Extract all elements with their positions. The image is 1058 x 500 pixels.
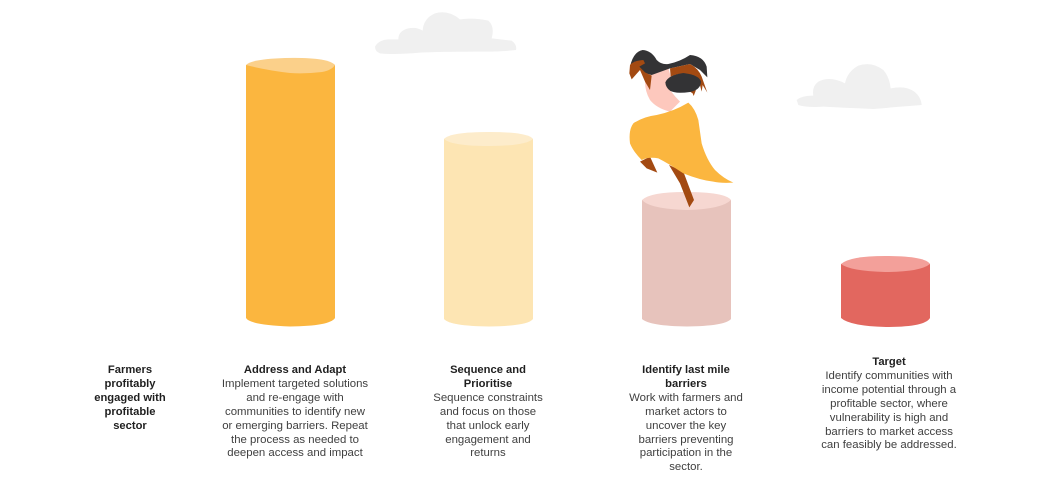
hair: right brown strands bbox=[670, 64, 707, 96]
text: Address and Adapt bbox=[222, 364, 368, 459]
text: Sequence and Prioritise: engagement and bbox=[445, 434, 531, 446]
text: Sequence and Prioritise bbox=[433, 364, 543, 459]
text: Address and Adapt: communities to identify new bbox=[225, 406, 365, 418]
hair: front lock bbox=[665, 73, 701, 93]
text: Target: can feasibly be addressed. bbox=[821, 439, 957, 451]
text: Farmers profitably engaged: profitably bbox=[105, 378, 155, 390]
bar: Identify last mile barriers bbox=[642, 192, 731, 326]
bar: Sequence and Prioritise bbox=[444, 132, 533, 326]
text: Sequence and Prioritise: and focus on those bbox=[440, 406, 536, 418]
text: Identify last mile barriers: market actors to bbox=[645, 406, 727, 418]
cloud: right bbox=[797, 64, 922, 109]
hair bbox=[630, 50, 707, 77]
text: Target: profitable sector, where bbox=[830, 398, 948, 410]
text: Address and Adapt: or emerging barriers. Repeat bbox=[222, 420, 368, 432]
back leg bbox=[640, 157, 657, 173]
text: Identify last mile barriers: Identify last mile bbox=[642, 364, 730, 376]
skin bbox=[645, 68, 680, 112]
figure: dancing woman bbox=[629, 50, 733, 207]
text: Identify last mile barriers: barriers preventing bbox=[639, 434, 733, 446]
text: Identify last mile barriers: sector. bbox=[669, 461, 703, 473]
text: Identify last mile barriers: barriers bbox=[665, 378, 707, 390]
text: Target: barriers to market access bbox=[825, 426, 953, 438]
text: Farmers profitably engaged: engaged with bbox=[94, 392, 166, 404]
bar: Address and Adapt bbox=[246, 58, 335, 327]
text: Farmers profitably engaged: profitable bbox=[105, 406, 155, 418]
text: Identify last mile barriers bbox=[629, 364, 743, 473]
text: Sequence and Prioritise: Prioritise bbox=[464, 378, 512, 390]
dress bbox=[630, 103, 733, 183]
text: Address and Adapt: the process as needed to bbox=[231, 434, 359, 446]
bar: Target bbox=[841, 256, 930, 327]
cloud: centre bbox=[375, 12, 516, 54]
text: Target bbox=[821, 356, 957, 451]
text: Address and Adapt: deepen access and impact bbox=[227, 447, 363, 459]
text: Address and Adapt: and re-engage with bbox=[246, 392, 344, 404]
hair: left brown strands bbox=[629, 60, 652, 90]
text: Address and Adapt: Address and Adapt bbox=[244, 364, 346, 376]
front leg bbox=[669, 165, 694, 207]
text: Sequence and Prioritise: that unlock early bbox=[447, 420, 529, 432]
text: Identify last mile barriers: Work with farmers and bbox=[629, 392, 743, 404]
text: Farmers profitably engaged bbox=[94, 364, 166, 432]
text: Sequence and Prioritise: Sequence and bbox=[450, 364, 526, 376]
text: Target: vulnerability is high and bbox=[830, 412, 948, 424]
text: Target: Target bbox=[872, 356, 906, 368]
text: Identify last mile barriers: uncover the key bbox=[646, 420, 726, 432]
text: Farmers profitably engaged: Farmers bbox=[108, 364, 152, 376]
text: Farmers profitably engaged: sector bbox=[113, 420, 147, 432]
text: Sequence and Prioritise: Sequence constraints bbox=[433, 392, 543, 404]
text: Sequence and Prioritise: returns bbox=[470, 447, 506, 459]
text: Identify last mile barriers: participation in the bbox=[640, 447, 732, 459]
text: Target: income potential through a bbox=[822, 384, 956, 396]
text: Target: Identify communities with bbox=[825, 370, 953, 382]
text: Address and Adapt: Implement targeted solutions bbox=[222, 378, 368, 390]
